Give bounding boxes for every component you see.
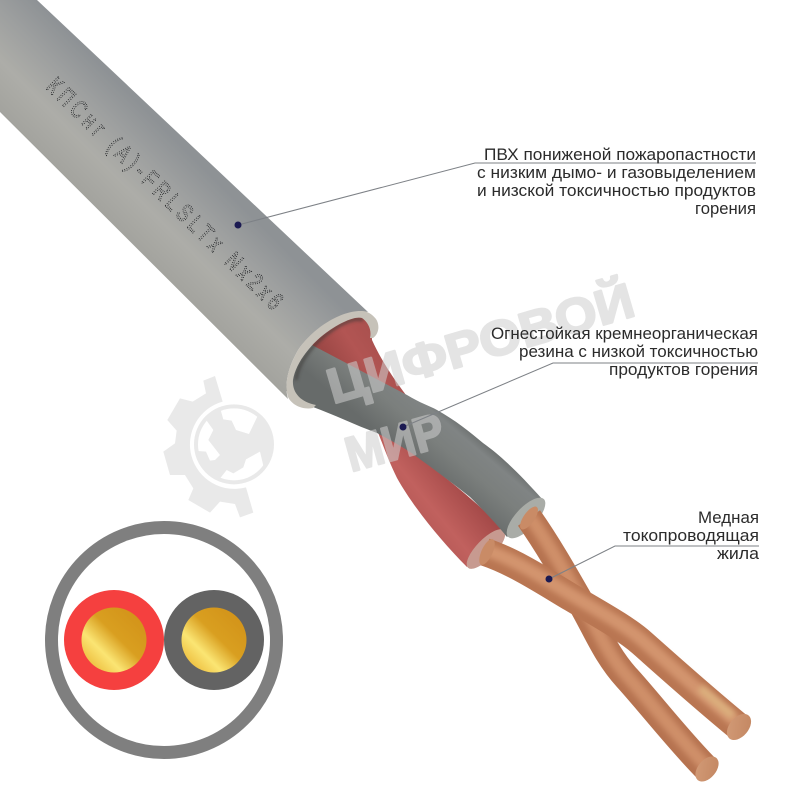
callout: copper conductor: жила bbox=[717, 544, 760, 563]
copper conductor, back bbox=[517, 504, 708, 769]
copper tip, front bbox=[722, 709, 756, 745]
copper conductor, front bbox=[476, 537, 740, 727]
callout: sheath material: и низской токсичностью продуктов bbox=[477, 181, 756, 200]
watermark text: МИР bbox=[340, 404, 450, 483]
copper tip, back bbox=[691, 752, 723, 786]
shadow inside sheath bbox=[296, 319, 363, 380]
watermark text bbox=[321, 273, 640, 483]
watermark text: ЦИФРОВОЙ bbox=[321, 273, 640, 415]
sheath cut rim bbox=[286, 311, 378, 408]
grey core end cap bbox=[501, 492, 551, 544]
callout: core insulation bbox=[400, 324, 758, 430]
callout: core insulation: резина с низкой токсичностью bbox=[519, 342, 758, 361]
callout: copper conductor: Медная bbox=[698, 508, 759, 527]
grey insulated core bbox=[285, 345, 543, 537]
callout: core insulation: продуктов горения bbox=[609, 360, 758, 379]
callout: copper conductor bbox=[546, 508, 760, 582]
outer sheath body bbox=[0, 0, 368, 399]
logo: gear and globe watermark bbox=[163, 376, 274, 517]
callout: sheath material: горения bbox=[695, 199, 756, 218]
red insulated core, lower part bbox=[375, 425, 504, 567]
callout: core insulation: Огнестойкая кремнеорганическая bbox=[491, 324, 758, 343]
red core end cap bbox=[461, 524, 511, 574]
callout: copper conductor: токопроводящая bbox=[623, 526, 759, 545]
sheath marking text: КПСнг (А)-FRLSLTx Nx2x6 bbox=[41, 72, 289, 315]
callout: sheath material: с низким дымо- и газовыделением bbox=[477, 163, 756, 182]
callout: sheath material: ПВХ пониженой пожаропастности bbox=[484, 145, 756, 164]
cross-section diagram bbox=[52, 528, 276, 752]
red insulated core, upper part bbox=[310, 317, 410, 420]
callout: sheath material bbox=[234, 145, 756, 228]
